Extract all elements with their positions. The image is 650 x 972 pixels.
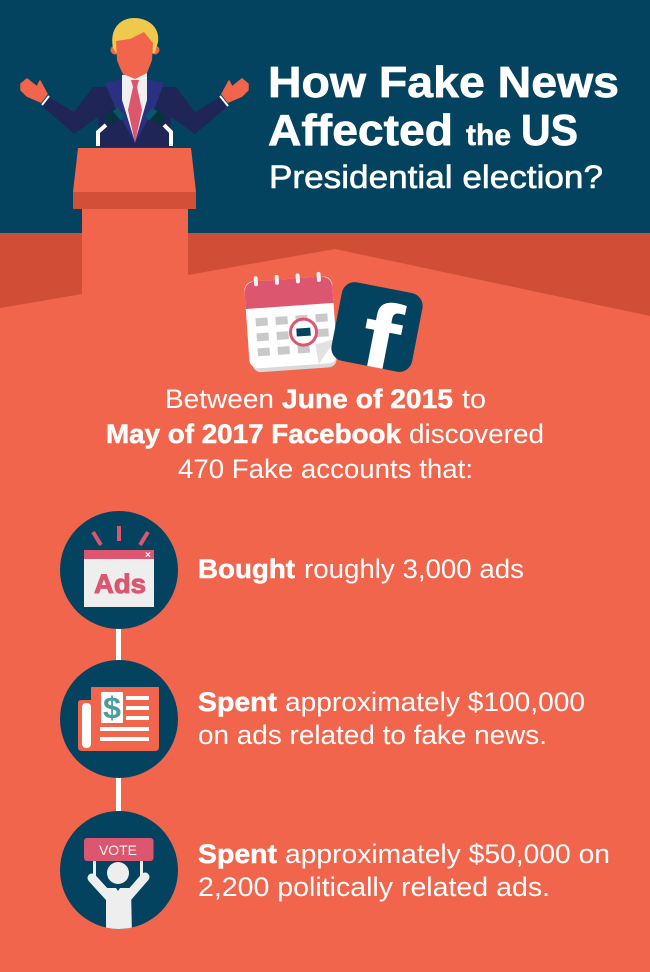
title: Affected [268,106,453,155]
icon: newspaper with dollar [60,660,178,778]
icon: facebook logo: f [351,280,411,403]
text: spent 100,000: Spent [198,687,277,717]
podium [73,148,196,304]
icon: person holding vote sign [60,811,178,935]
shirt and tie [122,73,147,143]
title [268,58,619,195]
item: spent on fake news ads [60,660,585,778]
intro text: May of 2017 Facebook [106,419,402,449]
text: spent 50,000 [198,839,610,902]
item: bought ads [60,511,524,629]
title: the [466,119,511,152]
icon: facebook logo [331,282,423,372]
hands [21,79,248,106]
text: bought [198,554,524,584]
icon: ads window [60,511,178,629]
icon: ads window: Ads [94,569,146,599]
text: bought: roughly 3,000 ads [304,554,524,584]
speaker arms and jacket [42,79,228,147]
icon: ads window: × [145,550,151,561]
intro text [106,384,544,484]
text: spent 50,000: Spent [198,839,277,869]
item: spent on political ads [60,811,610,935]
title: Presidential election? [269,159,603,195]
title: How Fake News [268,58,619,107]
intro text: discovered [409,419,544,449]
text: spent 100,000 [198,687,585,750]
icon: person holding vote sign: VOTE [99,842,137,858]
illustration: speaker at podium [21,18,248,304]
text: bought: Bought [198,554,295,584]
header background [0,0,650,233]
intro text: to [462,384,486,414]
stage backdrop [0,233,650,316]
intro text: 470 Fake accounts that: [178,454,473,484]
head and hair [110,18,160,79]
icon: calendar [244,271,338,373]
text: spent 100,000: on ads related to fake news. [198,720,547,750]
title: US [521,106,578,155]
microphones [98,107,171,146]
text: spent 50,000: 2,200 politically related ads. [198,872,550,902]
icon: newspaper with dollar: $ [103,690,121,725]
intro text: June of 2015 [282,384,453,414]
intro text: Between [165,384,274,414]
text: spent 100,000: approximately $100,000 [285,687,585,717]
text: spent 50,000: approximately $50,000 on [285,839,610,869]
timeline connector [116,625,121,820]
